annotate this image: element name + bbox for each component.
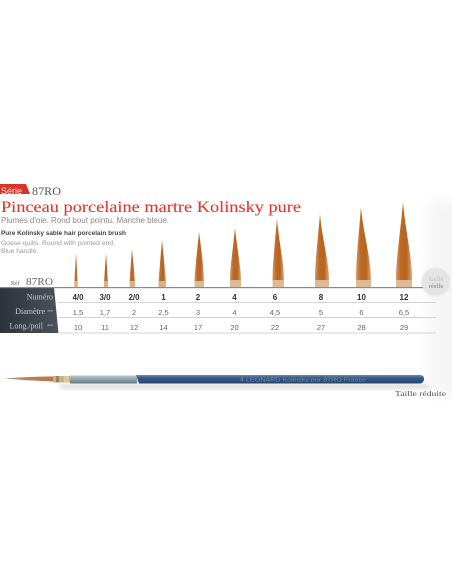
row: diametre: 2,5 [158, 308, 169, 317]
row: longueur: 12 [130, 323, 138, 332]
row: numero: 1 [161, 293, 166, 302]
row: longueur: 11 [101, 323, 109, 332]
reference label: Réf [11, 280, 20, 287]
row: longueur [74, 323, 408, 332]
row: numero: 4 [232, 293, 237, 302]
row labels: mm [48, 323, 53, 327]
row: numero: 12 [400, 293, 409, 302]
brush 1 [158, 240, 166, 288]
row: diametre: 5 [319, 308, 323, 317]
row: longueur: 28 [357, 323, 366, 332]
row: numero: 10 [357, 293, 366, 302]
row labels [9, 292, 53, 330]
brush 3/0 [104, 253, 108, 288]
English description: Goose quills. Round with pointed end. [1, 240, 115, 247]
series tag: 87RO [32, 186, 61, 198]
row: diametre: 6 [359, 308, 364, 317]
row labels: Diamètre [15, 307, 45, 316]
actual size badge [422, 268, 450, 296]
reduced size caption: Taille réduite [395, 389, 447, 398]
row: diametre: 2 [132, 308, 136, 317]
English description [1, 230, 126, 255]
actual size badge: réelle [429, 283, 443, 290]
row: diametre: 1,5 [73, 308, 83, 317]
row: longueur: 27 [317, 323, 325, 332]
series tag [0, 184, 61, 198]
row: numero: 2 [196, 293, 201, 302]
row labels: mm [48, 308, 53, 312]
table header panel [0, 288, 58, 333]
row: numero: 4/0 [72, 293, 84, 302]
row: diametre: 6,5 [399, 308, 409, 317]
English description: Blue handle. [1, 248, 38, 255]
brush 12 [396, 202, 412, 288]
title: Pinceau porcelaine martre Kolinsky pure [1, 199, 301, 216]
row: diametre: 4,5 [270, 308, 280, 317]
row labels: Long./poil [9, 322, 44, 330]
full brush [4, 375, 428, 388]
series tag: Série [1, 186, 22, 196]
brush 6 [272, 219, 284, 288]
row: diametre: 4 [232, 308, 237, 317]
actual size badge: Taille [429, 276, 443, 283]
row: longueur: 29 [400, 323, 408, 332]
row: longueur: 22 [271, 323, 279, 332]
brush 4/0 [74, 253, 78, 288]
English description: Pure Kolinsky sable hair porcelain brush [1, 230, 126, 237]
brush 10 [356, 207, 371, 288]
row labels: Numéro [27, 292, 53, 302]
row: numero: 8 [319, 293, 324, 302]
brush heads row [74, 202, 412, 288]
row: diametre [73, 308, 409, 317]
row: numero [72, 293, 409, 302]
row: longueur: 20 [230, 323, 239, 332]
row: longueur: 10 [74, 323, 82, 332]
row: diametre: 3 [196, 308, 200, 317]
brush 8 [315, 214, 329, 288]
row: longueur: 17 [194, 323, 202, 332]
reference label: 87RO [26, 277, 53, 288]
brush 2/0 [130, 249, 135, 288]
row: numero: 3/0 [99, 293, 111, 302]
row: longueur: 14 [159, 323, 168, 332]
size table [0, 287, 436, 334]
brush 2 [194, 232, 204, 288]
row: diametre: 1,7 [100, 308, 110, 317]
right side grey shading [428, 200, 452, 395]
full brush: 4 LEONARD Kolinsky pur 87RO France [240, 378, 366, 384]
row: numero: 2/0 [128, 293, 140, 302]
row: numero: 6 [273, 293, 278, 302]
reference label [11, 277, 53, 288]
French description: Plumes d'oie. Rond bout pointu. Manche bleue. [1, 215, 169, 225]
brush 4 [230, 228, 241, 288]
